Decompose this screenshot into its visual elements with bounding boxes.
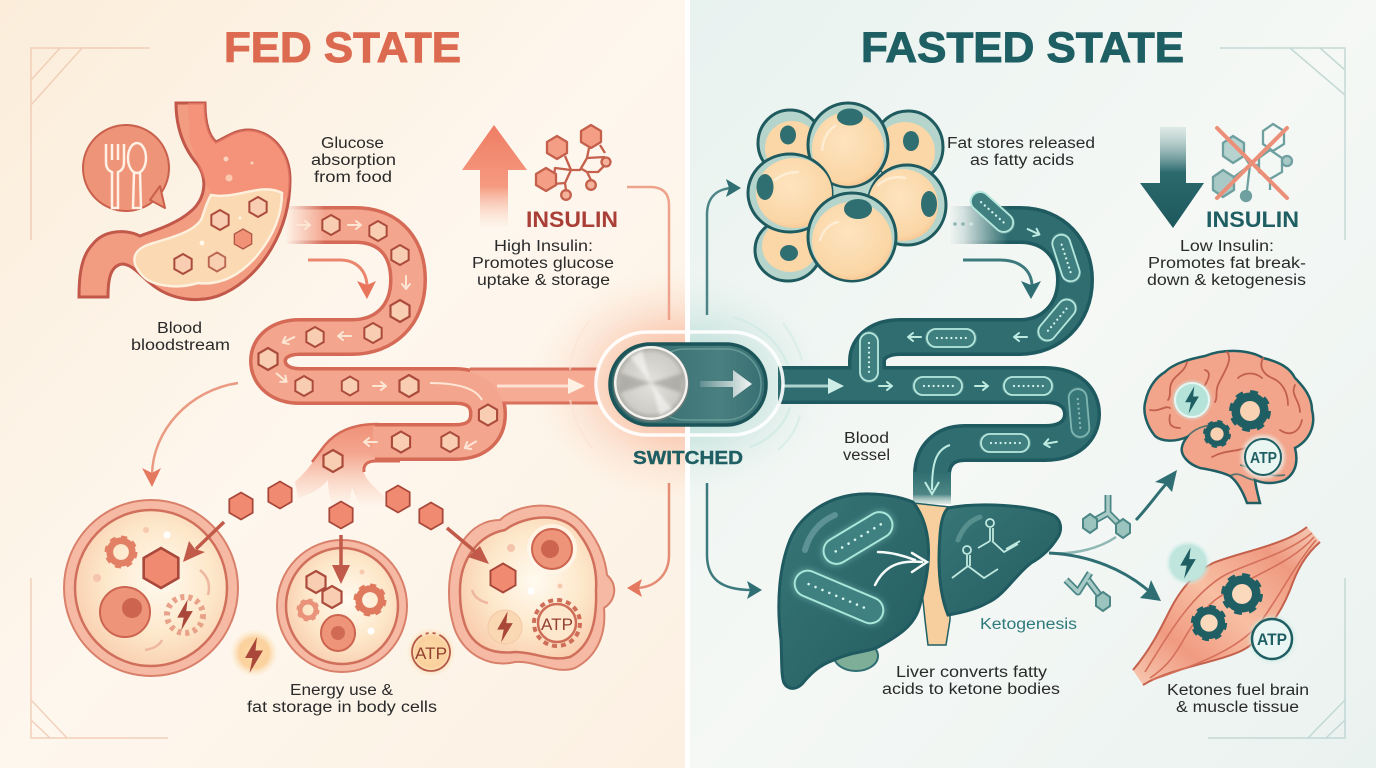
label: high insulin text: Promotes glucose [472, 255, 614, 272]
connector: to insulin feedback arrow top [627, 187, 669, 320]
label: fat stores released: as fatty acids [970, 152, 1074, 169]
label: low insulin text: down & ketogenesis [1147, 272, 1306, 289]
connector arrow: up to fat cells [707, 179, 741, 315]
arrow: stomach to vessel curve [308, 260, 376, 299]
glucose hexagons in vessel [258, 215, 497, 472]
label: glucose absorption: absorption [311, 152, 396, 169]
capsules in liver [787, 504, 901, 630]
icon: food speech bubble [83, 125, 169, 211]
chemical structures [952, 519, 1020, 578]
label: glucose absorption: from food [314, 169, 392, 186]
label: energy use and fat storage: fat storage in body cells [247, 699, 437, 716]
label: glucose absorption [311, 135, 396, 186]
cell: body cell 1 [64, 500, 238, 676]
blood vessel: fed glucose pathway [258, 203, 598, 507]
label: switched: SWITCHED [633, 448, 743, 468]
icon: brain [1144, 351, 1313, 503]
blood vessel: fasted fatty acid pathway [778, 186, 1091, 504]
arrow: high insulin up [462, 125, 527, 227]
badge: ATP [406, 627, 456, 677]
stomach fluid [134, 189, 282, 286]
label: blood vessel [843, 430, 890, 464]
badge: ATP: ATP [415, 644, 447, 663]
label: fat stores released [947, 135, 1095, 169]
label: ketones fuel: Ketones fuel brain [1167, 682, 1309, 699]
label: energy use and fat storage [247, 682, 437, 716]
icon: liver [779, 494, 1061, 688]
label: blood vessel: vessel [843, 447, 890, 464]
label: liver converts: acids to ketone bodies [882, 681, 1060, 698]
badge: energy bolt [230, 629, 278, 677]
icon: fat cell cluster [748, 103, 946, 281]
label: liver converts: Liver converts fatty [896, 664, 1047, 681]
arrow: vessel to cell 1 [142, 383, 238, 487]
panel: fasted state background [690, 0, 1376, 768]
connector arrow: down to body cell [627, 483, 669, 597]
label: high insulin text: uptake & storage [477, 272, 610, 289]
label: insulin heading fed: INSULIN [526, 207, 618, 232]
title: fasted state: FASTED STATE [861, 24, 1184, 72]
label: ketones fuel [1167, 682, 1309, 716]
label: bloodstream: bloodstream [131, 337, 230, 354]
switch: metabolic toggle [570, 317, 802, 450]
icon: stomach [79, 103, 290, 300]
label: blood vessel: Blood [844, 430, 889, 447]
label: bloodstream: Blood [157, 320, 202, 337]
icon: insulin molecule [536, 125, 610, 200]
icon: insulin molecule crossed out [1213, 124, 1292, 201]
label: ketogenesis: Ketogenesis [980, 616, 1077, 633]
label: low insulin text: Low Insulin: [1180, 238, 1274, 255]
label: high insulin text [472, 238, 614, 289]
label: glucose absorption: Glucose [321, 135, 384, 152]
icon: ketone molecules [1066, 495, 1130, 611]
fatty acid capsules [859, 186, 1091, 453]
label: energy use and fat storage: Energy use & [290, 682, 394, 699]
cell: body cell 3 [447, 506, 614, 670]
panel: fed state background [0, 0, 685, 768]
glucose hexagons released [229, 482, 443, 530]
label: fat stores released: Fat stores released [947, 135, 1095, 152]
label: high insulin text: High Insulin: [494, 238, 593, 255]
arrow: fat to vessel curve [963, 260, 1041, 299]
arrow: low insulin down [1140, 127, 1204, 228]
arrows: ketones to brain and muscle [1049, 470, 1177, 601]
cell: body cell 3: ATP [541, 615, 573, 634]
label: low insulin text: Promotes fat break- [1148, 255, 1306, 272]
connector arrow: down to liver [707, 483, 762, 599]
icon: brain: ATP [1250, 450, 1277, 467]
label: bloodstream [131, 320, 230, 354]
label: insulin heading fasted: INSULIN [1206, 207, 1299, 232]
icon: muscle: ATP [1257, 630, 1287, 649]
title: fed state: FED STATE [224, 24, 461, 72]
label: liver converts [882, 664, 1060, 698]
icon: muscle [1133, 527, 1320, 685]
cell: body cell 2 [277, 535, 407, 672]
label: low insulin text [1147, 238, 1306, 289]
label: ketones fuel: & muscle tissue [1176, 699, 1299, 716]
